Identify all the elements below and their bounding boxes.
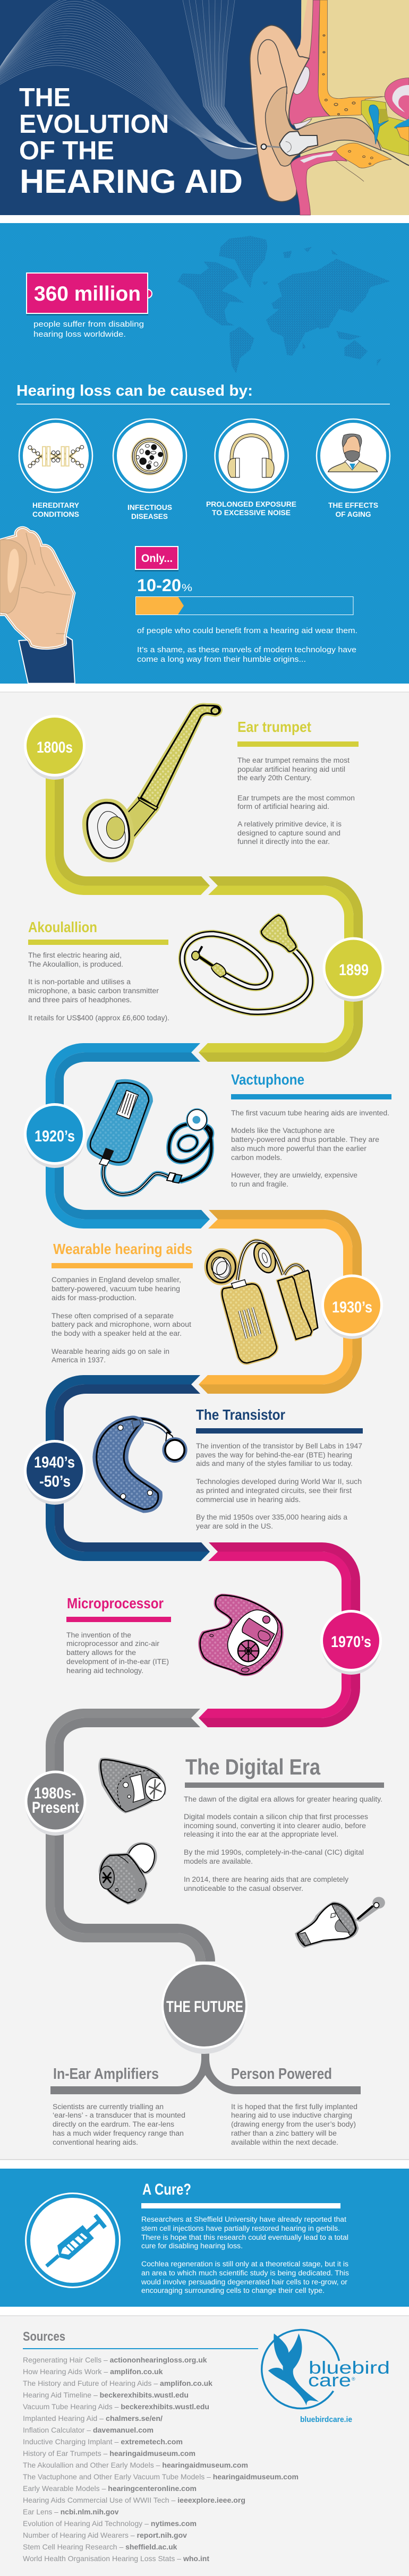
body text: releasing it into the ear at the appropriate level.: [184, 1830, 338, 1838]
body text: stem cell injections have partially restored hearing in gerbils.: [141, 2224, 340, 2232]
source list: World Health Organisation Hearing Loss Stats – who.int: [23, 2554, 209, 2563]
marker: 1899: 1899: [339, 961, 369, 979]
cause: infectious diseases: DISEASES: [131, 513, 168, 521]
marker: 1920's: [24, 1103, 86, 1168]
panel: person powered: available within the next decade.: [231, 2138, 338, 2146]
body text: year are sold in the US.: [196, 1522, 273, 1530]
source list: Early Wearable Models – hearingcenteronline.com: [23, 2484, 197, 2493]
body text: microphone, a basic carbon transmitter: [28, 987, 159, 995]
icon: DNA: [28, 445, 84, 468]
source list: [23, 2356, 299, 2563]
icon: bluebird: [262, 2330, 339, 2408]
body text: [184, 1795, 382, 1892]
body text: Digital models contain a silicon chip that first processes: [184, 1813, 368, 1821]
body text: [196, 1442, 362, 1530]
source list: Number of Hearing Aid Wearers – report.nih.gov: [23, 2531, 187, 2539]
timeline path: yellow: [46, 745, 363, 1062]
body text: hearing aid technology.: [66, 1667, 143, 1675]
body text: Companies in England develop smaller,: [52, 1276, 181, 1284]
panel: ear trumpet: [84, 705, 359, 860]
cause: prolonged exposure to noise: PROLONGED EXPOSURE: [206, 500, 296, 508]
marker: 1899: [323, 937, 385, 1002]
cause: the effects of aging: OF AGING: [336, 510, 371, 518]
text: wearers: of people who could benefit from a hearing aid wear them.: [137, 626, 357, 635]
body text: aids for mass-production.: [52, 1294, 137, 1302]
body text: cure for disabling hearing loss.: [141, 2242, 243, 2250]
body text: The ear trumpet remains the most: [237, 756, 350, 764]
source list: Inductive Charging Implant – extremetech.com: [23, 2437, 183, 2446]
timeline path: grey: [46, 1709, 361, 2094]
body text: The invention of the: [66, 1631, 131, 1639]
illustration: in-the-ear aid: [198, 1594, 284, 1676]
panel: a cure: [0, 2169, 409, 2307]
marker: 1930's: 1930’s: [332, 1299, 372, 1316]
source list: Regenerating Hair Cells – actiononhearingloss.org.uk: [23, 2356, 207, 2364]
body text: battery pack and microphone, worn about: [52, 1320, 191, 1328]
heading: Wearable hearing aids: [53, 1241, 192, 1257]
illustration: ear cross-section with hearing aid: [250, 0, 409, 215]
icon: old man: [328, 434, 378, 472]
heading: [237, 719, 359, 747]
panel: person powered: (drawing energy from the user’s body): [231, 2120, 356, 2128]
callout: Only...: Only...: [141, 552, 173, 565]
icon: petri dish: [131, 437, 168, 475]
panel: person powered: rather than a zinc battery will be: [231, 2129, 337, 2137]
logo: bluebird care: bluebirdcare.ie: [300, 2416, 352, 2424]
body text: [231, 1109, 389, 1188]
logo: bluebird care: bluebird: [309, 2358, 390, 2377]
panel: Akoulallion: [28, 915, 310, 1022]
body text: Cochlea regeneration is still only at a theoretical stage, but it is: [141, 2260, 348, 2268]
body text: [66, 1631, 169, 1675]
heading: [66, 1595, 171, 1622]
body text: battery allows for the: [66, 1649, 136, 1657]
heading: [231, 1071, 391, 1099]
marker: 1980s-Present: 1980s-: [34, 1785, 76, 1802]
marker: 1970's: 1970’s: [331, 1633, 371, 1651]
illustration: Akoulallion: [182, 915, 310, 1012]
source list: Implanted Hearing Aid – chalmers.se/en/: [23, 2414, 163, 2423]
panel: person powered: It is hoped that the first fully implanted: [231, 2103, 357, 2111]
panel: person powered: hearing aid to use inductive charging: [231, 2111, 352, 2119]
cause: the effects of aging: [317, 419, 390, 518]
source list: Inflation Calculator – davemanuel.com: [23, 2426, 154, 2434]
heading: [28, 919, 168, 945]
icon: syringe: [25, 2194, 120, 2287]
body text: commercial use in hearing aids.: [196, 1496, 301, 1504]
title: EVOLUTION: [19, 110, 169, 139]
body text: [141, 2215, 349, 2294]
body text: Models like the Vactuphone are: [231, 1127, 335, 1135]
body text: Researchers at Sheffield University have already reported that: [141, 2215, 346, 2223]
panel: in-ear amplifiers: [53, 2066, 185, 2146]
text: people suffer: people suffer from disabling: [33, 320, 144, 329]
body text: [28, 951, 169, 1022]
text: wearers: come a long way from their humble origins...: [137, 655, 306, 664]
heading: [196, 1406, 363, 1434]
body text: an area to which much scientific study is being dedicated. This: [141, 2269, 349, 2277]
panel: Vactuphone: [89, 1071, 391, 1195]
title: HEARING AID: [20, 163, 243, 200]
cause: the effects of aging: THE EFFECTS: [328, 501, 378, 509]
stat: 360 million: [27, 273, 152, 315]
body text: form of artificial hearing aid.: [237, 803, 329, 811]
cause: prolonged exposure to noise: TO EXCESSIVE NOISE: [212, 509, 291, 517]
marker: 1800s: 1800s: [37, 739, 73, 756]
body text: development of in-the-ear (ITE): [66, 1658, 169, 1666]
heading: The Transistor: [196, 1406, 285, 1423]
stat: 10-20%: %: [182, 583, 192, 594]
callout: Only...: [135, 547, 178, 572]
body text: [237, 756, 355, 846]
source list: Stem Cell Hearing Research – sheffield.ac.uk: [23, 2543, 177, 2551]
timeline path: blue: [46, 1043, 210, 1229]
heading: Ear trumpet: [237, 719, 311, 735]
body text: the early 20th Century.: [237, 774, 312, 782]
panel: the digital era: [98, 1754, 385, 1948]
icon: headphones: [228, 436, 274, 477]
marker: 1940's-50's: 1940’s: [34, 1454, 75, 1471]
logo: bluebird care: ®: [352, 2376, 355, 2382]
heading: [185, 1754, 384, 1788]
source list: History of Ear Trumpets – hearingaidmuseum.com: [23, 2449, 195, 2458]
body text: carbon models.: [231, 1154, 282, 1162]
source list: Ear Lens – ncbi.nlm.nih.gov: [23, 2507, 119, 2516]
sound waves: [0, 0, 261, 159]
body text: battery-powered, vacuum tube hearing: [52, 1285, 180, 1293]
cause: hereditary conditions: CONDITIONS: [32, 510, 79, 518]
source list: The Vactuphone and Other Early Vacuum Tube Models – hearingaidmuseum.com: [23, 2472, 299, 2481]
body text: models are available.: [184, 1857, 253, 1865]
body text: It retails for US$400 (approx £6,600 today).: [28, 1014, 169, 1022]
title: [19, 83, 243, 200]
heading: The Digital Era: [185, 1754, 321, 1779]
body text: The Akoulallion, is produced.: [28, 960, 123, 968]
marker: 1930's: [321, 1275, 383, 1339]
marker: 1800s: [24, 715, 86, 780]
panel: in-ear amplifiers: ‘ear-lens’ - a transducer that is mounted: [53, 2111, 185, 2119]
panel: hero header: [0, 0, 409, 215]
heading: causes: Hearing loss can be caused by:: [16, 382, 253, 399]
body text: The first vacuum tube hearing aids are invented.: [231, 1109, 389, 1117]
body text: would involve persuading degenerated hair cells to re-grow, or: [141, 2278, 348, 2286]
cause: hereditary conditions: [19, 419, 92, 518]
panel: person powered: Person Powered: [231, 2066, 332, 2083]
timeline path: pink: [199, 1542, 360, 1727]
body text: The first electric hearing aid,: [28, 951, 122, 959]
cause: hereditary conditions: HEREDITARY: [32, 501, 79, 509]
panel: in-ear amplifiers: In-Ear Amplifiers: [53, 2066, 159, 2083]
panel: in-ear amplifiers: Scientists are currently trialling an: [53, 2103, 164, 2111]
body text: In 2014, there are hearing aids that are completely: [184, 1875, 348, 1883]
body text: to run and fragile.: [231, 1180, 288, 1188]
stat: 360 million: 360 million: [34, 283, 141, 305]
heading: A Cure?: [142, 2181, 191, 2198]
source list: Hearing Aids Commercial Use of WWII Tech – ieeexplore.ieee.org: [23, 2496, 245, 2504]
timeline path: orange: [199, 1210, 362, 1394]
title: OF THE: [19, 137, 114, 165]
marker: 1980s-Present: Present: [32, 1799, 79, 1816]
text: people suffer: [33, 320, 144, 339]
body text: By the mid 1990s, completely-in-the-canal (CIC) digital: [184, 1848, 364, 1856]
body text: These often comprised of a separate: [52, 1312, 174, 1320]
body text: aids and many of the styles familiar to us today.: [196, 1460, 353, 1468]
body text: the body with a speaker held at the ear.: [52, 1329, 182, 1337]
body text: There is hope that this research could eventually lead to a total: [141, 2233, 348, 2241]
illustration: behind-the-ear aid: [95, 1418, 188, 1511]
panel: sources: [23, 2330, 299, 2563]
illustration: hand cupped to ear: [0, 527, 75, 684]
body text: unnoticeable to the casual observer.: [184, 1884, 303, 1892]
body text: America in 1937.: [52, 1356, 106, 1364]
body text: popular artificial hearing aid until: [237, 765, 345, 773]
illustration: completely-in-canal aid: [295, 1897, 385, 1948]
body text: also much more powerful than the earlier: [231, 1145, 367, 1153]
heading: Sources: [23, 2330, 65, 2344]
panel: wearable hearing aids: [52, 1241, 318, 1364]
panel: microprocessor: [66, 1594, 284, 1676]
body text: incoming sound, converting it into clearer audio, before: [184, 1822, 366, 1830]
text: people suffer: hearing loss worldwide.: [33, 330, 126, 339]
heading: Akoulallion: [28, 919, 97, 935]
panel: in-ear amplifiers: has a much wider frequency range than: [53, 2129, 184, 2137]
progress bar: 10-20%: [136, 597, 353, 615]
dotted world map: [177, 236, 390, 373]
heading: Vactuphone: [231, 1071, 304, 1088]
source list: The History and Future of Hearing Aids – amplifon.co.uk: [23, 2379, 212, 2387]
timeline path: navy: [46, 1375, 210, 1561]
panel: footer background: [0, 2315, 409, 2576]
marker: 1970's: [320, 1610, 382, 1675]
illustration: ear trumpet: [84, 705, 220, 860]
marker: the future: THE FUTURE: [166, 1998, 243, 2016]
illustration: Vactuphone: [89, 1081, 211, 1195]
panel: timeline background: [0, 692, 409, 2160]
marker: 1980s-Present: [24, 1771, 86, 1836]
panel: person powered: [231, 2066, 357, 2146]
text: wearers: It’s a shame, as these marvels of modern technology have: [137, 645, 356, 654]
source list: How Hearing Aids Work – amplifon.co.uk: [23, 2367, 163, 2376]
panel: hearing loss statistics: [0, 223, 409, 684]
illustration: digital aid 2: [99, 1842, 157, 1905]
cause: infectious diseases: INFECTIOUS: [127, 504, 172, 511]
source list: Vacuum Tube Hearing Aids – beckerexhibits.wustl.edu: [23, 2402, 209, 2411]
body text: paves the way for behind-the-ear (BTE) hearing: [196, 1451, 352, 1459]
stat: 10-20%: 10-20: [137, 576, 181, 595]
illustration: wearable hearing aid: [205, 1241, 318, 1363]
body text: battery-powered and thus portable. They are: [231, 1136, 379, 1144]
body text: designed to capture sound and: [237, 829, 340, 837]
body text: The dawn of the digital era allows for greater hearing quality.: [184, 1795, 382, 1803]
body text: A relatively primitive device, it is: [237, 820, 342, 828]
cause: infectious diseases: [113, 419, 186, 521]
source list: The Akoulallion and Other Early Models – hearingaidmuseum.com: [23, 2461, 248, 2469]
marker: 1940's-50's: [24, 1440, 86, 1505]
cause: prolonged exposure to noise: [206, 419, 296, 517]
body text: However, they are unwieldy, expensive: [231, 1171, 357, 1179]
body text: Technologies developed during World War II, such: [196, 1478, 362, 1486]
marker: 1940's-50's: -50’s: [39, 1473, 71, 1490]
panel: in-ear amplifiers: conventional hearing aids.: [53, 2138, 138, 2146]
body text: Wearable hearing aids go on sale in: [52, 1347, 169, 1355]
source list: Hearing Aid Timeline – beckerexhibits.wustl.edu: [23, 2391, 189, 2399]
body text: funnel it directly into the ear.: [237, 838, 330, 846]
body text: microprocessor and zinc-air: [66, 1640, 160, 1648]
body text: encouraging surrounding cells to change their cell type.: [141, 2287, 325, 2294]
title: THE: [19, 83, 71, 112]
heading: [141, 2181, 340, 2208]
body text: [52, 1276, 191, 1364]
source list: Evolution of Hearing Aid Technology – nytimes.com: [23, 2519, 197, 2528]
marker: 1920's: 1920’s: [35, 1128, 75, 1145]
body text: By the mid 1950s over 335,000 hearing aids a: [196, 1513, 348, 1521]
text: wearers: [137, 626, 357, 664]
heading: Microprocessor: [67, 1595, 164, 1611]
panel: the transistor: [95, 1406, 363, 1530]
illustration: digital aid 1: [98, 1758, 166, 1813]
body text: It is non-portable and utilises a: [28, 978, 131, 986]
body text: The invention of the transistor by Bell Labs in 1947: [196, 1442, 362, 1450]
body text: as printed and integrated circuits, see their first: [196, 1487, 352, 1495]
heading: [52, 1241, 193, 1268]
panel: in-ear amplifiers: directly on the eardrum. The ear-lens: [53, 2120, 174, 2128]
logo: bluebird care: care: [308, 2370, 351, 2391]
marker: the future: [161, 1963, 248, 2054]
body text: and three pairs of headphones.: [28, 996, 132, 1004]
logo: bluebird care: [262, 2330, 390, 2424]
body text: Ear trumpets are the most common: [237, 794, 355, 802]
